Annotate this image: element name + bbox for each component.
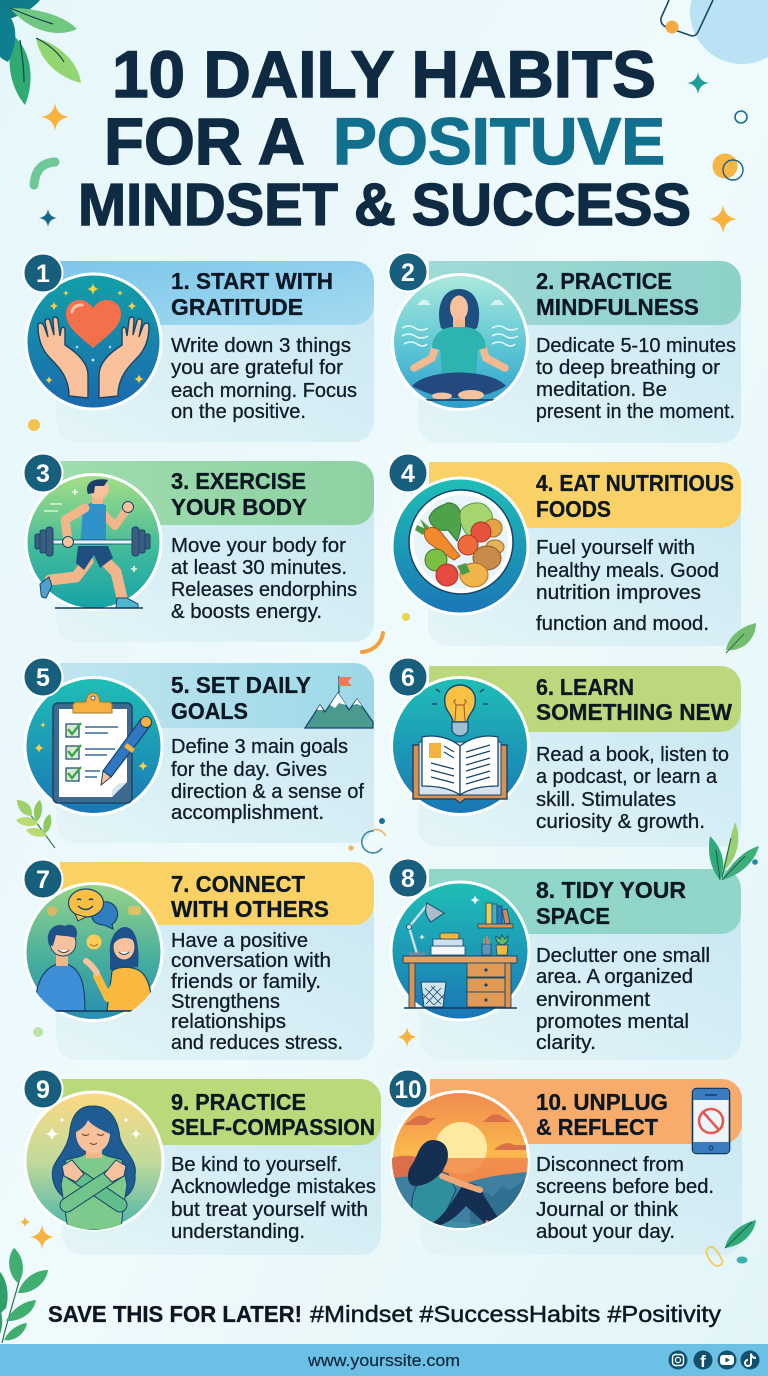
panel: card 8 tidy your space (388, 858, 741, 1060)
badge: number 10 (388, 1070, 428, 1108)
decoration: twig, swirl and dots (16, 800, 386, 853)
card 5 heading: GOALS (171, 698, 248, 724)
title: 10 DAILY HABITS (112, 37, 656, 111)
card 5 heading: 5. SET DAILY (171, 672, 311, 698)
card 6 text: skill. Stimulates (536, 788, 676, 811)
card 4 text: Fuel yourself with (536, 536, 695, 559)
card 2 header band (429, 261, 741, 325)
card 10 header band (430, 1079, 742, 1144)
card 9 text: Acknowledge mistakes (171, 1175, 376, 1198)
card 7 heading (171, 871, 329, 922)
card 6 text: Read a book, listen to (536, 743, 729, 766)
card 8 text: Declutter one small (536, 944, 710, 967)
decoration: bottom sparkles and plants (0, 1216, 756, 1343)
card 5 heading (171, 672, 311, 724)
card 2 heading: 2. PRACTICE (536, 268, 672, 294)
card 9 header band (60, 1079, 381, 1145)
footer bar (0, 1344, 768, 1376)
title: POSITUVE (333, 104, 665, 178)
card 10 heading: & REFLECT (536, 1114, 658, 1140)
card 4 text: nutrition improves (536, 581, 701, 604)
icon: woman watching a sunset (392, 1092, 528, 1240)
card 6 heading: SOMETHING NEW (536, 699, 732, 725)
card 9 heading: SELF-COMPASSION (171, 1114, 375, 1140)
card 3 text: & boosts energy. (171, 600, 322, 623)
card 7 text: and reduces stress. (171, 1031, 343, 1054)
card 5 text: direction & a sense of (171, 780, 364, 803)
card 9 text: Be kind to yourself. (171, 1153, 342, 1176)
decoration: top-left leaves (0, 0, 81, 105)
card 10 text: about your day. (536, 1220, 675, 1243)
card 9 text: but treat yourself with (171, 1198, 368, 1221)
card 1 text: Write down 3 things (171, 334, 351, 357)
icon: runner with barbell (26, 474, 161, 610)
title (78, 37, 691, 238)
card 1 text (171, 334, 357, 423)
icon: phone with no symbol (692, 1088, 730, 1154)
card 3 text: Releases endorphins (171, 578, 357, 601)
badge: number 2 (388, 252, 428, 292)
panel: card 2 mindfulness (388, 252, 741, 443)
decoration: middle dots arc and leaf (28, 419, 756, 653)
card 6 text: a podcast, or learn a (536, 765, 718, 788)
icon: open book and light bulb (392, 678, 528, 814)
badge: number 10: 10 (394, 1076, 422, 1104)
card 1 text: on the positive. (171, 400, 306, 423)
card 2 text: meditation. Be (536, 378, 667, 401)
card 1 text: each morning. Focus (171, 379, 357, 402)
card 4 text (536, 536, 719, 635)
card 8 heading (536, 877, 686, 929)
badge: number 3: 3 (36, 460, 50, 488)
card 3 heading: 3. EXERCISE (171, 468, 306, 494)
card 3 heading (171, 468, 307, 520)
card 1 heading: 1. START WITH (171, 268, 333, 294)
card 4 header band (429, 462, 741, 528)
card 1 text: you are grateful for (171, 356, 343, 379)
card 2 text: Dedicate 5-10 minutes (536, 334, 736, 357)
call to action with hashtags: SAVE THIS FOR LATER! (48, 1301, 302, 1327)
badge: number 8: 8 (401, 865, 415, 893)
card 2 text: present in the moment. (536, 400, 735, 423)
card 5 text (171, 735, 364, 824)
card 4 text: function and mood. (536, 612, 709, 635)
badge: number 9 (24, 1070, 62, 1108)
panel: card 1 gratitude (24, 254, 374, 442)
panel: card 9 self-compassion (24, 1070, 381, 1255)
badge: number 8 (388, 858, 428, 898)
card 7 heading: WITH OTHERS (171, 896, 329, 922)
card 7 header band (60, 862, 374, 925)
decoration: top-left sparkle and arc (34, 103, 69, 227)
icon: woman hugging herself (25, 1092, 163, 1230)
badge: number 5 (24, 658, 62, 696)
card 10 heading (536, 1089, 668, 1140)
card 1 heading (171, 268, 333, 320)
card 7 text: conversation with (171, 949, 331, 972)
card 7 text (171, 929, 343, 1054)
card 7 text: friends or family. (171, 970, 321, 993)
card 8 heading: SPACE (536, 903, 610, 929)
card 2 heading (536, 268, 699, 320)
card 4 heading: 4. EAT NUTRITIOUS (536, 470, 734, 496)
card 8 header band (429, 869, 741, 934)
card 5 header band (60, 663, 374, 728)
badge: number 4: 4 (401, 460, 415, 488)
card 4 text: healthy meals. Good (536, 559, 719, 582)
panel: card 4 nutritious foods (388, 454, 741, 646)
panel: card 10 unplug and reflect (388, 1070, 742, 1255)
card 10 text (536, 1153, 714, 1243)
card 10 text: Journal or think (536, 1198, 679, 1221)
card 5 text: for the day. Gives (171, 758, 327, 781)
card 10 text: screens before bed. (536, 1175, 714, 1198)
badge: number 2: 2 (401, 259, 415, 287)
decoration: leaves and sparkles around card 8 (33, 822, 759, 1047)
panel: card 6 learn something new (388, 658, 741, 847)
card 3 text: Move your body for (171, 534, 346, 557)
social icons (668, 1350, 760, 1371)
card 8 text: environment (536, 988, 650, 1011)
card 3 text: at least 30 minutes. (171, 556, 347, 579)
decoration: top-right circle and phone outline (661, 0, 768, 64)
title: FOR A (104, 104, 305, 178)
card 3 heading: YOUR BODY (171, 494, 307, 520)
card 10 text: Disconnect from (536, 1153, 684, 1176)
badge: number 7 (24, 860, 62, 898)
title: MINDSET & SUCCESS (78, 172, 691, 238)
card 8 text: promotes mental (536, 1010, 689, 1033)
card 4 heading (536, 470, 734, 522)
card 9 text: understanding. (171, 1220, 305, 1243)
card 2 text: to deep breathing or (536, 356, 720, 379)
icon: two people talking (25, 884, 162, 1020)
card 9 heading (171, 1089, 375, 1140)
panel: card 3 exercise (24, 454, 374, 642)
card 1 heading: GRATITUDE (171, 294, 303, 320)
card 8 text: area. A organized (536, 965, 693, 988)
card 9 text (171, 1153, 376, 1243)
badge: number 7: 7 (36, 866, 50, 894)
icon: plate of healthy food (392, 478, 528, 614)
card 5 text: accomplishment. (171, 801, 324, 824)
card 7 text: Strengthens (171, 990, 280, 1013)
badge: number 6: 6 (401, 664, 415, 692)
call to action with hashtags (48, 1301, 721, 1327)
card 5 text: Define 3 main goals (171, 735, 348, 758)
badge: number 1: 1 (36, 260, 50, 288)
badge: number 5: 5 (36, 664, 50, 692)
badge: number 1 (24, 254, 62, 292)
card 1 header band (60, 261, 374, 325)
card 6 heading (536, 674, 732, 725)
call to action with hashtags: #Mindset #SuccessHabits #Positivity (310, 1301, 721, 1327)
social icons: f (700, 1352, 706, 1371)
card 6 heading: 6. LEARN (536, 674, 634, 700)
card 7 heading: 7. CONNECT (171, 871, 305, 897)
website address: www.yourssite.com (307, 1352, 460, 1370)
panel: card 7 connect with others (24, 860, 374, 1060)
icon: tidy desk (391, 882, 529, 1020)
panel: card 5 daily goals (24, 658, 374, 843)
card 7 text: Have a positive (171, 929, 308, 952)
card 8 text: clarity. (536, 1031, 596, 1054)
icon: meditating woman (392, 274, 528, 410)
icon: mountain with flag (305, 676, 373, 728)
card 3 text (171, 534, 357, 623)
card 6 text: curiosity & growth. (536, 810, 705, 833)
card 2 heading: MINDFULNESS (536, 294, 699, 320)
card 3 header band (60, 461, 374, 525)
badge: number 6 (388, 658, 428, 696)
icon: hands holding a heart (26, 274, 161, 409)
card 2 text (536, 334, 736, 423)
card 9 heading: 9. PRACTICE (171, 1089, 306, 1115)
icon: clipboard checklist and pen (25, 678, 162, 814)
card 8 heading: 8. TIDY YOUR (536, 877, 686, 903)
card 10 heading: 10. UNPLUG (536, 1089, 668, 1115)
badge: number 9: 9 (36, 1076, 50, 1104)
badge: number 4 (388, 454, 428, 492)
card 8 text (536, 944, 710, 1054)
badge: number 3 (24, 454, 62, 492)
card 4 heading: FOODS (536, 496, 611, 522)
decoration: right-side sparkles and rings (687, 72, 747, 233)
card 6 header band (429, 666, 741, 732)
card 6 text (536, 743, 729, 833)
card 7 text: relationships (171, 1010, 286, 1033)
